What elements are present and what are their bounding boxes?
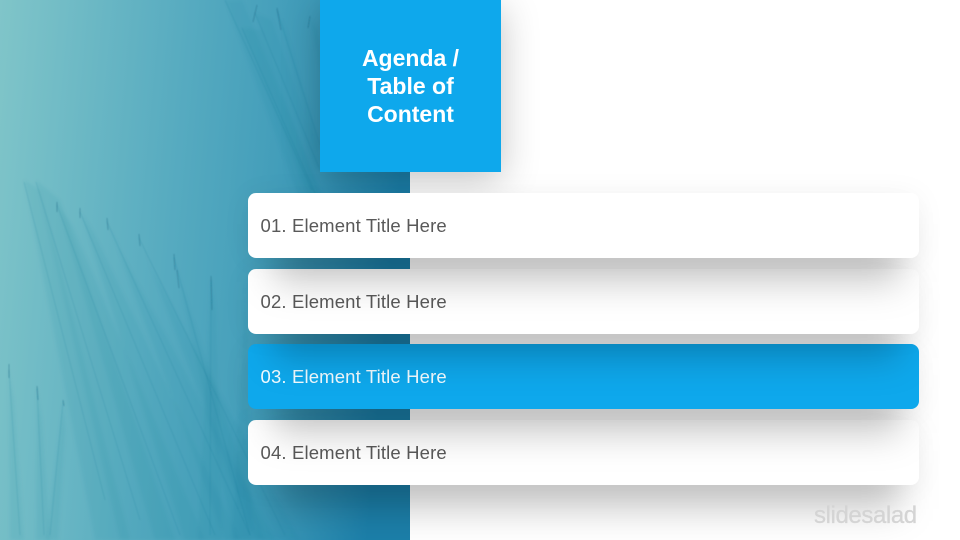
item 3 highlighted: 03. Element Title Here (260, 366, 447, 387)
item 1 (248, 193, 919, 258)
header block: title: Content (367, 101, 454, 127)
item 1: 01. Element Title Here (260, 215, 447, 236)
header block: title: Table of (367, 73, 454, 99)
list: agenda items (248, 193, 919, 485)
item 4: 04. Element Title Here (260, 442, 447, 463)
item 2: 02. Element Title Here (260, 290, 447, 312)
header block: title (320, 0, 501, 172)
item 3 highlighted (248, 344, 919, 409)
item 2 (248, 268, 919, 334)
watermark logo: slidesalad (814, 502, 917, 528)
item 4 (248, 420, 919, 485)
header block: title: Agenda / (362, 45, 459, 71)
background panel: teal gradient with fractal lines (0, 0, 410, 540)
